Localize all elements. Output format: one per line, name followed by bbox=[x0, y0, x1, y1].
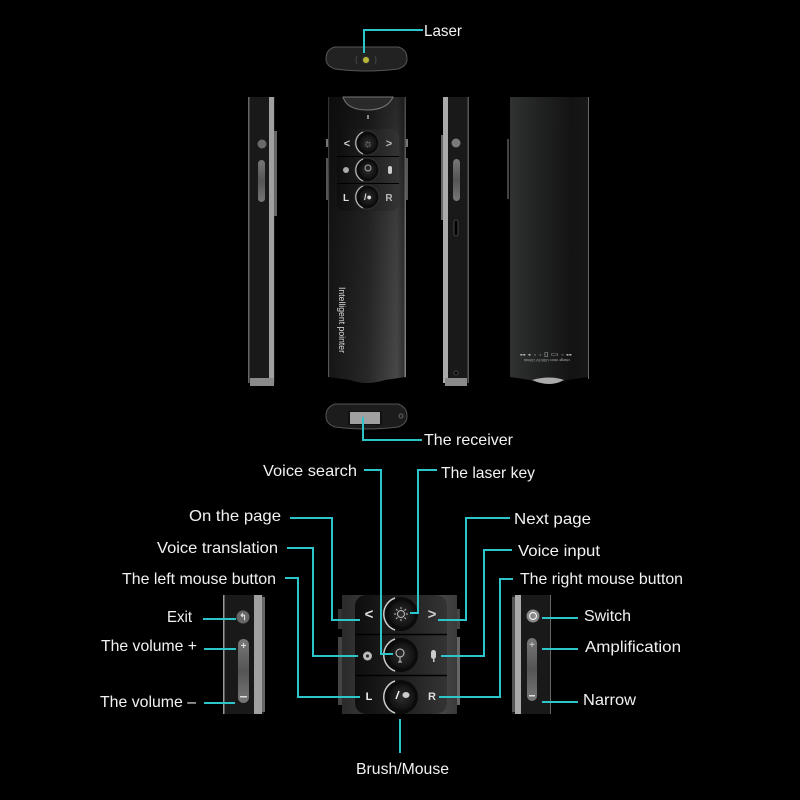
icon: laser aperture bbox=[362, 56, 370, 64]
button panel: < bbox=[344, 138, 350, 150]
right side button zoom bbox=[512, 595, 551, 714]
icon: translation bbox=[363, 652, 372, 660]
callout labels: Voice translation bbox=[157, 540, 278, 557]
callout labels: The left mouse button bbox=[122, 571, 276, 588]
back view bbox=[507, 97, 589, 384]
left side view bbox=[248, 97, 277, 386]
right side button zoom: + bbox=[529, 640, 535, 651]
front view bbox=[326, 97, 408, 383]
callout labels: Voice search bbox=[263, 463, 357, 480]
icon: brush and mouse bbox=[396, 691, 410, 699]
product name: Intelligent pointer bbox=[337, 287, 347, 353]
button panel: /● bbox=[364, 192, 372, 202]
key labels: L bbox=[366, 691, 373, 703]
callout labels: Amplification bbox=[585, 639, 681, 656]
button panel bbox=[337, 129, 399, 211]
callout labels: The volume – bbox=[100, 694, 196, 711]
button panel: L bbox=[343, 193, 349, 204]
back view: ▪▪ ◦ ▭ ▯ ◦ ◦ ▪ ▪▪ bbox=[520, 351, 572, 357]
key labels bbox=[365, 606, 437, 703]
callout labels: Next page bbox=[514, 511, 591, 528]
callout labels bbox=[100, 23, 683, 778]
receiver end cap bbox=[326, 404, 407, 429]
icon: bulb bbox=[396, 649, 404, 662]
callout labels: Narrow bbox=[583, 692, 636, 709]
right side view bbox=[441, 97, 469, 386]
callout labels: Laser bbox=[424, 23, 463, 40]
laser end cap bbox=[326, 47, 407, 71]
callout labels: Voice input bbox=[518, 543, 601, 560]
callout labels: The right mouse button bbox=[520, 571, 683, 588]
icon: sun bbox=[394, 607, 408, 621]
callout labels: On the page bbox=[189, 508, 281, 525]
button panel: > bbox=[386, 138, 392, 150]
left side button zoom: + bbox=[241, 641, 247, 652]
button panel: ☼ bbox=[363, 138, 373, 150]
key labels: R bbox=[428, 691, 436, 703]
button panel: R bbox=[385, 193, 393, 204]
callout labels: Brush/Mouse bbox=[356, 761, 449, 778]
left side button zoom: ↰ bbox=[239, 612, 247, 622]
icon: microphone bbox=[431, 650, 436, 662]
callout labels: The laser key bbox=[441, 465, 535, 482]
callout labels: Exit bbox=[167, 609, 193, 626]
knobs bbox=[384, 597, 418, 714]
left side button zoom bbox=[223, 595, 265, 714]
callout labels: The receiver bbox=[424, 432, 514, 449]
center button panel zoom bbox=[338, 595, 460, 714]
back view: charge micro USB 5V 100mA bbox=[524, 358, 570, 363]
callout labels: The volume + bbox=[101, 638, 197, 655]
callout labels: Switch bbox=[584, 608, 631, 625]
key labels: > bbox=[428, 606, 437, 623]
callout lines bbox=[203, 30, 578, 753]
key labels: < bbox=[365, 606, 374, 623]
